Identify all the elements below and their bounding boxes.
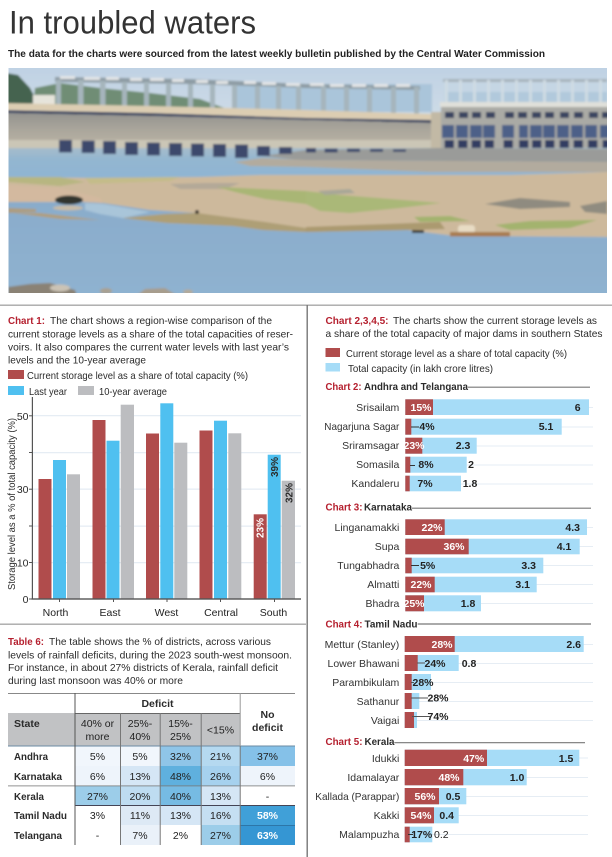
chart 2: Andhra and Telangana: Nagarjuna Sagar [324,421,400,433]
deficit table: Tamil Nadu [14,810,67,822]
chart 5: Kerala: 1.5 [559,753,573,765]
deficit table: Karnataka [14,771,62,783]
chart 1 bar chart: 10 [17,558,29,570]
title: In troubled waters [9,4,256,40]
charts 2-5 description: a share of the total capacity of major dams in southern States [326,328,602,340]
chart 5: Kerala: 1.0 [510,772,524,784]
chart 3: Karnataka: Almatti [367,579,399,591]
chart 4: Tamil Nadu: Lower Bhawani [328,658,399,670]
chart 4: Tamil Nadu: Sathanur [357,696,400,708]
chart 2: Andhra and Telangana: 4% [419,421,435,433]
chart 4: Tamil Nadu: Mettur (Stanley) [325,639,399,651]
panel: chart 1 region-wise storage [6,315,301,619]
chart 5: Kerala: 0.4 [439,810,454,822]
table description: Table 6: [8,636,44,648]
chart 1 bar chart: Central [204,607,238,619]
chart 4: Tamil Nadu: 74% [427,711,449,723]
deficit table: State [14,718,40,730]
chart 2: Andhra and Telangana: 2.3 [456,440,470,452]
chart 1 description: voirs. It also compares the current water levels with last year’s [8,342,289,354]
deficit table: No [260,709,274,721]
chart 3: Karnataka: Supa [375,541,399,553]
chart 4: Tamil Nadu: 0.8 [462,658,476,670]
chart 4: Tamil Nadu: 28% [431,639,453,651]
chart 1 bar chart: 32% [284,483,296,503]
deficit table: 40% [170,791,191,803]
table description: For instance, in about 27% districts of Kerala, rainfall deficit [8,662,278,674]
chart 1 bar chart: 39% [270,457,281,477]
chart 2: Andhra and Telangana: Chart 2: [326,381,362,393]
deficit table: 15%- [168,718,193,730]
chart 1 legend: 10-year average [99,386,167,398]
deficit table: 7% [132,830,148,842]
chart 3: Karnataka: 22% [410,579,432,591]
table description: The table shows the % of districts, across various [49,636,271,648]
chart 2: Andhra and Telangana: 15% [410,402,432,414]
chart 3: Karnataka: 4.3 [565,522,580,534]
deficit table: Deficit [141,698,174,710]
deficit table: Andhra [14,751,48,763]
chart 4: Tamil Nadu: 24% [424,658,446,670]
chart 2: Andhra and Telangana: Srisailam [356,402,400,414]
chart 3: Karnataka: 22% [421,522,443,534]
chart 1 description: current storage levels as a share of the total capacities of reser- [8,328,293,340]
chart 1 y axis title: Storage level as a % of total capacity (%) [6,418,18,590]
chart 2: Andhra and Telangana [324,381,593,491]
chart 1 bar chart: East [99,607,121,619]
deficit table: 40% or [81,718,115,730]
deficit table: Kerala [14,791,44,803]
chart 1 description [8,315,293,366]
deficit table: 6% [90,771,105,783]
charts 2-5 legend: Total capacity (in lakh crore litres) [348,363,493,375]
chart 3: Karnataka: Linganamakki [335,522,399,534]
charts 2-5 legend: Current storage level as a share of total capacity (%) [346,348,567,360]
deficit table: 27% [210,830,231,842]
chart 3: Karnataka: 5% [420,560,436,572]
chart 3: Karnataka: Karnataka [364,502,412,514]
chart 4: Tamil Nadu: Chart 4: [326,618,362,630]
chart 3: Karnataka: 4.1 [557,541,571,553]
chart 1 bar chart: South [260,607,287,619]
chart 5: Kerala: Malampuzha [339,829,399,841]
deficit table: - [266,791,270,803]
chart 1 bar chart: West [155,607,178,619]
charts 2-5 description: Chart 2,3,4,5: [326,315,388,327]
deficit table: 26% [210,771,231,783]
deficit table: 27% [87,791,108,803]
chart 2: Andhra and Telangana: 23% [403,440,425,452]
chart 4: Tamil Nadu: 28% [427,692,449,704]
chart 2: Andhra and Telangana: Somasila [356,459,399,471]
charts 2-5 legend [326,348,567,375]
chart 1 bar chart: 30 [17,484,29,496]
chart 3: Karnataka: 3.3 [521,560,536,572]
deficit table: 32% [170,751,191,763]
chart 3: Karnataka: 3.1 [515,579,530,591]
deficit table: 16% [210,810,231,822]
deficit table: <15% [207,724,234,736]
deficit table: 13% [210,791,231,803]
chart 1 legend [8,370,248,398]
deficit table: 48% [170,771,191,783]
deficit table: 63% [257,830,279,842]
chart 2: Andhra and Telangana: 7% [417,478,433,490]
chart 3: Karnataka: 1.8 [461,598,475,610]
chart 4: Tamil Nadu: 28% [412,677,434,689]
chart 5: Kerala: Chart 5: [326,736,362,748]
chart 1 bar chart: 0 [23,594,29,606]
chart 1 bar chart: North [43,607,68,619]
subtitle: The data for the charts were sourced from the latest weekly bulletin published by the Central Water Commission [8,48,545,60]
deficit table: 20% [129,791,151,803]
deficit table: 37% [257,751,278,763]
photo: dam with low reservoir [0,60,612,298]
charts 2-5 description: The charts show the current storage levels as [393,315,597,327]
chart 1 description: Chart 1: [8,315,45,327]
chart 3: Karnataka [326,502,593,611]
deficit table: deficit [252,722,283,734]
chart 3: Karnataka: Chart 3: [326,502,362,514]
deficit table: 3% [90,810,105,822]
deficit table: 13% [170,810,191,822]
chart 2: Andhra and Telangana: Kandaleru [351,478,399,490]
chart 3: Karnataka: Bhadra [365,598,399,610]
chart 3: Karnataka: 36% [443,541,465,553]
chart 4: Tamil Nadu: Parambikulam [332,677,400,689]
chart 5: Kerala: 0.5 [446,791,460,803]
table description: during last monsoon was 40% or more [8,675,183,687]
panel: charts 2 to 5 dam storage [315,315,602,842]
chart 1 bar chart [17,397,301,619]
chart 2: Andhra and Telangana: 5.1 [539,421,553,433]
panel: table 6 rainfall deficit [8,636,295,845]
deficit table: 2% [173,830,188,842]
chart 4: Tamil Nadu: Tamil Nadu [364,618,418,630]
chart 1 legend: Current storage level as a share of total capacity (%) [27,370,248,382]
deficit table: 13% [129,771,151,783]
chart 5: Kerala: Kakki [374,810,399,822]
chart 1 description: levels and the 10-year average [8,354,146,366]
deficit table: 25% [170,731,191,743]
chart 1 description: The chart shows a region-wise comparison of the [50,315,272,327]
chart 5: Kerala: 54% [410,810,432,822]
deficit table: 5% [132,751,148,763]
chart 2: Andhra and Telangana: 2 [468,459,474,471]
chart 5: Kerala: 0.2 [434,829,449,841]
chart 5: Kerala: 48% [438,772,460,784]
chart 1 bar chart: 50 [17,411,29,423]
table description [8,636,292,687]
chart 4: Tamil Nadu: 2.6 [566,639,581,651]
deficit table: - [96,830,100,842]
chart 5: Kerala: Idamalayar [347,772,400,784]
chart 5: Kerala [315,736,588,842]
deficit table: 40% [129,731,151,743]
deficit table: 5% [90,751,105,763]
chart 2: Andhra and Telangana: Andhra and Telangana [364,381,468,393]
charts 2-5 description [326,315,602,340]
chart 4: Tamil Nadu [325,618,593,728]
chart 5: Kerala: 56% [414,791,436,803]
chart 5: Kerala: Kallada (Parappar) [315,791,399,803]
deficit table: Telangana [14,830,62,842]
deficit table: 25%- [128,718,153,730]
deficit table: 21% [210,751,231,763]
chart 5: Kerala: Kerala [364,736,395,748]
chart 2: Andhra and Telangana: 6 [575,402,581,414]
table description: levels of rainfall deficits, during the 2023 south-west monsoon. [8,649,292,661]
deficit table: 11% [130,810,150,822]
deficit table: more [86,731,110,743]
deficit table: 58% [257,810,279,822]
chart 2: Andhra and Telangana: 1.8 [463,478,477,490]
deficit table [8,693,295,845]
chart 2: Andhra and Telangana: 8% [418,459,434,471]
section dividers [0,304,612,857]
chart 1 legend: Last year [29,386,67,398]
chart 5: Kerala: 17% [411,829,433,841]
chart 4: Tamil Nadu: Vaigai [371,715,399,727]
chart 3: Karnataka: 25% [403,598,425,610]
chart 3: Karnataka: Tungabhadra [337,560,399,572]
deficit table: 6% [260,771,275,783]
chart 5: Kerala: 47% [463,753,485,765]
chart 1 bar chart: 23% [256,518,267,538]
chart 2: Andhra and Telangana: Sriramsagar [342,440,400,452]
chart 5: Kerala: Idukki [372,753,399,765]
